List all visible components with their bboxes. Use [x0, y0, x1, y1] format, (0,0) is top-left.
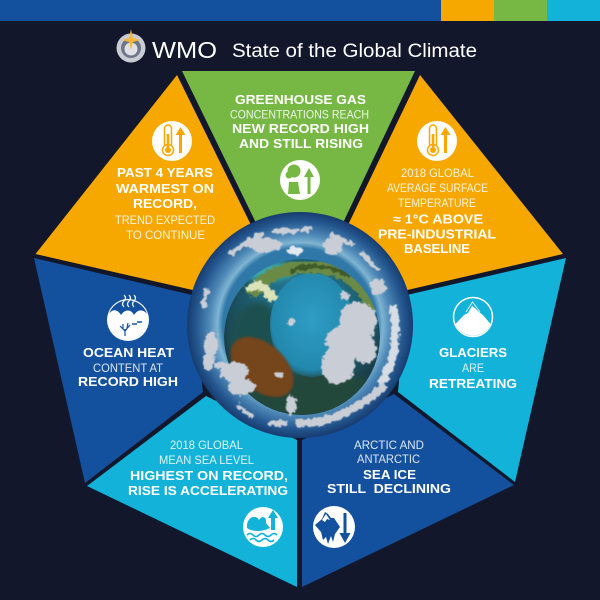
- sea ice text: SEA ICE: [363, 467, 416, 482]
- sea ice text: ARCTIC AND: [354, 440, 424, 452]
- sea ice text: ANTARCTIC: [357, 454, 420, 466]
- global temperature text: PRE-INDUSTRIAL: [378, 226, 496, 242]
- land: brown desert: [229, 336, 295, 398]
- ocean heat text: CONTENT AT: [93, 363, 163, 375]
- greenhouse gas text: AND STILL RISING: [239, 136, 363, 151]
- greenhouse gas text: [230, 92, 369, 151]
- panel: glaciers: [398, 258, 566, 482]
- panel: ocean heat: [34, 258, 203, 483]
- icon: mountain: [454, 298, 492, 336]
- land: green crescent: [248, 266, 376, 312]
- header colour bar: [0, 0, 600, 21]
- global temperature text: ≈ 1°C ABOVE: [393, 212, 483, 226]
- past 4 years text: [115, 165, 215, 242]
- sea level text: MEAN SEA LEVEL: [159, 455, 255, 467]
- global temperature text: [378, 168, 496, 256]
- greenhouse gas text: CONCENTRATIONS REACH: [230, 110, 369, 122]
- atmosphere disc: [187, 212, 413, 438]
- sea ice text: STILL DECLINING: [327, 481, 451, 496]
- global temperature text: TEMPERATURE: [398, 198, 476, 210]
- header: WMO logo and title: [116, 29, 477, 63]
- glaciers text: RETREATING: [429, 376, 517, 391]
- sea level text: RISE IS ACCELERATING: [128, 483, 288, 498]
- icon: smokestack and rising arrow: [280, 160, 320, 200]
- past 4 years text: TREND EXPECTED: [115, 215, 215, 227]
- glaciers text: ARE: [462, 363, 484, 375]
- icon: melting iceberg and down arrow: [313, 506, 355, 548]
- icon: thermometer and arrow: [417, 121, 457, 161]
- panel: greenhouse gas: [182, 71, 415, 225]
- sea level text: [128, 440, 288, 498]
- ocean heat text: RECORD HIGH: [78, 374, 178, 389]
- sea level text: HIGHEST ON RECORD,: [130, 468, 288, 483]
- big cloud over the ocean: [339, 302, 377, 342]
- title: State of the Global Climate: [232, 41, 477, 62]
- global temperature text: AVERAGE SURFACE: [387, 183, 488, 195]
- global temperature text: BASELINE: [404, 241, 470, 256]
- icon: waves and rising arrow: [243, 507, 283, 547]
- sea ice text: [327, 440, 451, 496]
- clouds: [202, 226, 395, 427]
- glaciers text: [429, 345, 517, 391]
- greenhouse gas text: NEW RECORD HIGH: [232, 121, 369, 136]
- greenhouse gas text: GREENHOUSE GAS: [235, 92, 366, 107]
- ocean heat text: [78, 345, 178, 389]
- planet surface: [224, 259, 380, 415]
- globe: [187, 212, 413, 438]
- panel: sea level: [87, 396, 297, 587]
- sea level text: 2018 GLOBAL: [170, 440, 244, 452]
- global temperature text: 2018 GLOBAL: [401, 168, 475, 180]
- past 4 years text: PAST 4 YEARS: [117, 165, 213, 180]
- panel: sea ice: [302, 394, 514, 587]
- icon: WMO emblem: [116, 29, 146, 62]
- ocean heat text: OCEAN HEAT: [83, 345, 174, 360]
- icon: ocean waves and coral: [107, 295, 149, 341]
- WMO wordmark: WMO: [152, 37, 217, 63]
- panel: global average temperature: [348, 75, 563, 291]
- glaciers text: GLACIERS: [439, 345, 507, 360]
- panel: past 4 years: [36, 75, 251, 291]
- past 4 years text: TO CONTINUE: [126, 230, 205, 242]
- past 4 years text: WARMEST ON: [116, 181, 214, 196]
- past 4 years text: RECORD,: [133, 196, 197, 211]
- icon: thermometer and arrow: [152, 121, 192, 161]
